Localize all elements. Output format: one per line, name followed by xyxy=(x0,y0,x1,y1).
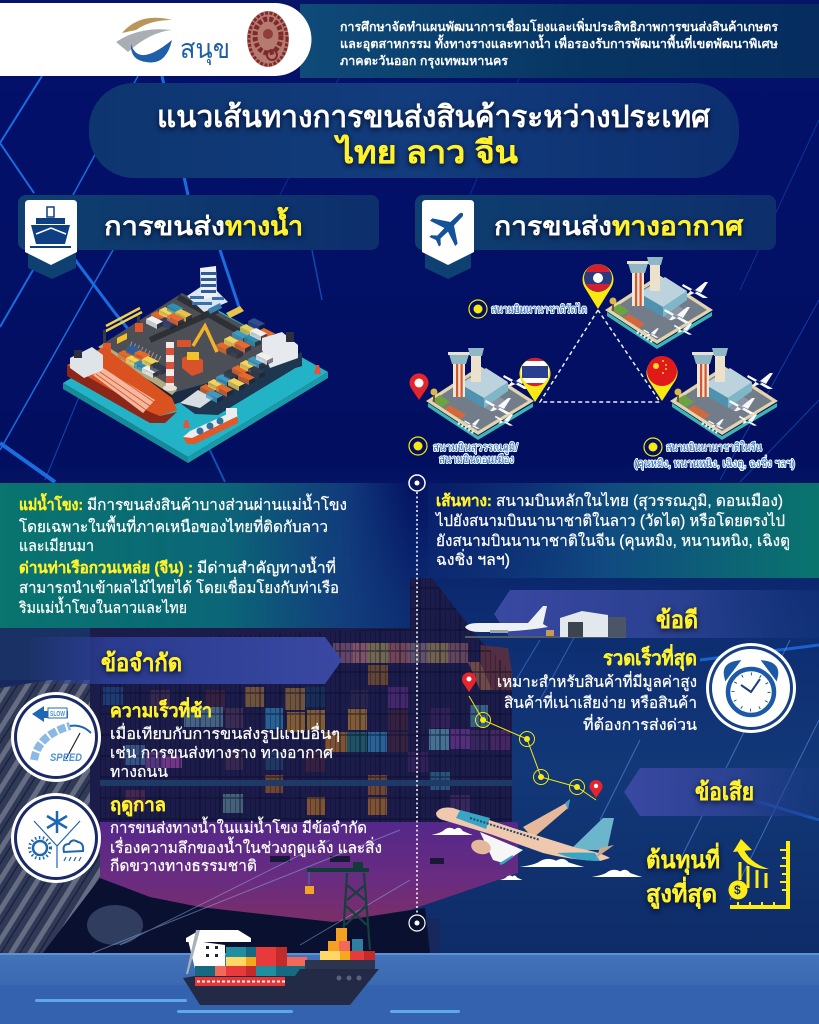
label: Thai airports: สนามบินดอนเมือง xyxy=(439,453,514,466)
route dashes xyxy=(540,310,660,402)
title xyxy=(89,83,739,178)
text: seasons: เรื่องความลึกของน้ำในช่วงฤดูแล้ง และสิ่ง xyxy=(110,836,382,858)
text: seasons: กีดขวางทางธรรมชาติ xyxy=(110,858,257,875)
icon: slow speed: SPEED xyxy=(50,752,82,764)
header band xyxy=(300,4,819,78)
label: Thai airports xyxy=(409,437,519,466)
panel: air route text: ไปยังสนามบินนานาชาติในลาว (วัดไต) หรือโดยตรงไป xyxy=(434,512,785,530)
logo panel xyxy=(0,3,311,76)
heading: air transport xyxy=(415,195,776,279)
flight route xyxy=(462,672,602,800)
pin: red location xyxy=(410,373,428,400)
title: ไทย ลาว จีน xyxy=(334,134,518,170)
crane xyxy=(305,862,370,950)
icon: plane at warehouse xyxy=(465,606,626,638)
container blocks xyxy=(103,643,512,815)
photo: container ship and dock xyxy=(0,578,518,990)
label: China airports: สนามบินนานาชาติในจีน xyxy=(666,441,762,454)
lighthouse xyxy=(163,342,177,391)
airport: China xyxy=(670,348,778,440)
logo: seal xyxy=(247,11,289,67)
pin: China flag xyxy=(646,356,678,401)
buoys xyxy=(183,365,321,428)
banner: limitations: ข้อจำกัด xyxy=(101,650,182,677)
label: Wattay airport xyxy=(469,300,587,318)
yellow crane xyxy=(177,326,217,376)
heading: water transport: ทางน้ำ xyxy=(225,206,303,241)
text: highest cost xyxy=(646,842,720,910)
panel: Mekong text: โดยเฉพาะในพื้นที่ภาคเหนือของไทยที่ติดกับลาว xyxy=(19,515,328,536)
panel: Mekong text: ด่านท่าเรือกวนเหล่ย (จีน) : xyxy=(19,559,193,577)
container stacks xyxy=(118,303,275,378)
text: slow speed: เช่น การขนส่งทางราง ทางอากาศ xyxy=(110,745,333,762)
panel: Mekong text: สามารถนำเข้าผลไม้ไทยได้ โดยเชื่อมโยงกับท่าเรือ xyxy=(19,577,339,597)
text: fastest xyxy=(497,643,697,734)
text: highest cost: สูงที่สุด xyxy=(646,876,717,910)
label: Wattay airport: สนามบินนานาชาติวัดไต xyxy=(491,303,587,316)
panel: air route text: สนามบินหลักในไทย (สุวรรณภูมิ, ดอนเมือง) xyxy=(496,492,783,511)
icon: alarm clock xyxy=(706,643,796,733)
text: seasons: ฤดูกาล xyxy=(110,795,166,817)
heading: water transport: การขนส่ง xyxy=(104,211,225,241)
ship: navy container vessel xyxy=(180,332,302,415)
icon: ship xyxy=(30,207,71,248)
air route diagram xyxy=(409,257,795,470)
icon: plane xyxy=(422,201,475,254)
panel: Mekong text: และเมียนมา xyxy=(19,538,94,555)
banner: disadvantages: ข้อเสีย xyxy=(695,779,754,806)
dotted timeline xyxy=(409,475,425,931)
container ship xyxy=(183,928,379,1005)
superstructure xyxy=(186,930,251,974)
banner: advantages xyxy=(465,590,819,638)
containers xyxy=(195,928,375,976)
office buildings xyxy=(187,266,244,318)
heading: air transport: การขนส่ง xyxy=(494,211,612,241)
terminal platform xyxy=(98,293,302,405)
ship: small tanker xyxy=(183,408,238,444)
label: Thai airports: สนามบินสุวรรณภูมิ/ xyxy=(433,442,519,454)
panel: Mekong text: ริมแม่น้ำโขงในลาวและไทย xyxy=(18,596,187,617)
icon: slow speed: SLOW xyxy=(50,711,65,718)
ship: red container vessel xyxy=(67,347,177,423)
airport: Thailand xyxy=(426,348,534,440)
sea xyxy=(0,953,819,1024)
pin: Laos flag xyxy=(582,264,614,309)
panel: air route text: ยังสนามบินนานาชาติในจีน (คุนหมิง, หนานหนิง, เฉิงตู xyxy=(436,532,790,551)
header band: และอุตสาหกรรม ทั้งทางรางและทางน้ำ เพื่อรองรับการพัฒนาพื้นที่เขตพัฒนาพิเศษ xyxy=(340,34,778,52)
logo: swoosh mark: สนุข xyxy=(180,34,230,66)
text: fastest: เหมาะสำหรับสินค้าที่มีมูลค่าสูง xyxy=(497,671,697,692)
label: China airports: (คุนหมิง, หนานหนิง, เฉิงตู, ฉงชิ่ง ฯลฯ) xyxy=(634,455,795,470)
text: seasons xyxy=(110,795,382,875)
panel: Mekong text xyxy=(0,483,410,628)
text: slow speed: ทางถนน xyxy=(110,764,168,781)
panel: Mekong text: มีด่านสำคัญทางน้ำที่ xyxy=(197,556,336,577)
gantry crane xyxy=(103,308,143,352)
banner: limitations xyxy=(30,637,342,684)
icon: seasons xyxy=(11,793,101,883)
logo: swoosh mark xyxy=(116,18,230,66)
panel: air route text xyxy=(428,483,819,578)
text: slow speed: เมื่อเทียบกับการขนส่งรูปแบบอื่นๆ xyxy=(110,723,340,744)
header band: ภาคตะวันออก กรุงเทพมหานคร xyxy=(340,54,508,69)
icon: rising cost: $ xyxy=(734,883,741,897)
airport: Laos xyxy=(605,257,713,349)
illustration: airplane xyxy=(431,799,642,880)
text: slow speed: ความเร็วที่ช้า xyxy=(110,697,212,722)
heading: water transport xyxy=(18,195,379,279)
banner: advantages: ข้อดี xyxy=(656,607,698,634)
text: slow speed xyxy=(110,697,340,781)
icon: rising cost xyxy=(728,839,788,907)
hull xyxy=(183,969,379,1005)
title: แนวเส้นทางการขนส่งสินค้าระหว่างประเทศ xyxy=(157,101,711,134)
text: highest cost: ต้นทุนที่ xyxy=(646,842,720,876)
panel: air route text: เส้นทาง: xyxy=(436,492,492,510)
banner: disadvantages xyxy=(624,768,819,816)
panel: Mekong text: แม่น้ำโขง: xyxy=(19,493,83,514)
text: fastest: ที่ต้องการส่งด่วน xyxy=(583,714,697,734)
text: fastest: สินค้าที่เน่าเสียง่าย หรือสินค้า xyxy=(504,692,697,712)
icon: slow speed xyxy=(11,692,101,782)
panel: air route text: ฉงชิ่ง ฯลฯ) xyxy=(436,549,510,569)
port illustration xyxy=(63,266,328,463)
panel: Mekong text: มีการขนส่งสินค้าบางส่วนผ่านแม่น้ำโขง xyxy=(87,493,347,514)
text: seasons: การขนส่งทางน้ำในแม่น้ำโขง มีข้อจำกัด xyxy=(110,816,367,837)
heading: air transport: ทางอากาศ xyxy=(612,211,744,241)
text: fastest: รวดเร็วที่สุด xyxy=(603,643,697,671)
header band: การศึกษาจัดทำแผนพัฒนาการเชื่อมโยงและเพิ่มประสิทธิภาพการขนส่งสินค้าเกษตร xyxy=(340,18,778,34)
pin: Thai flag xyxy=(520,358,550,402)
label: China airports xyxy=(634,438,795,470)
